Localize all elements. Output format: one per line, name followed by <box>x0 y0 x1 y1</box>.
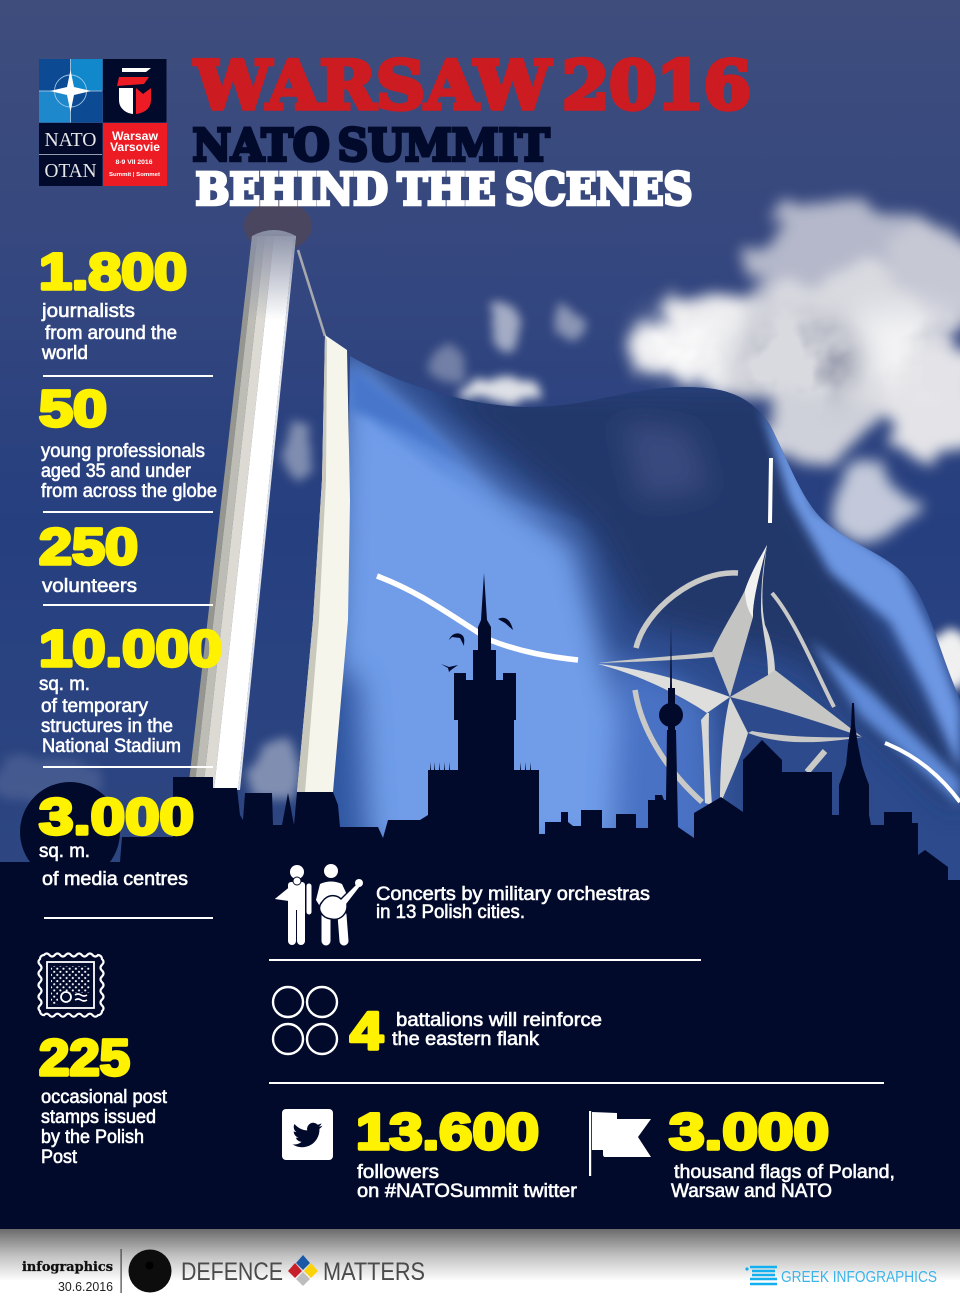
stat: temporary structures: structures in the <box>41 716 173 737</box>
logo: NATO OTAN tile: NATO <box>44 130 96 151</box>
stat: media centres: sq. m. <box>39 841 90 862</box>
title line 3: BEHIND THE SCENES <box>196 164 692 216</box>
stat: battalions: 4 <box>350 1002 384 1061</box>
icon: twitter <box>282 1109 333 1160</box>
stat: flags: 3.000 <box>669 1103 829 1160</box>
stat: post stamps: Post <box>41 1147 78 1168</box>
footer band <box>0 1229 960 1315</box>
logo: black circle <box>128 1250 172 1292</box>
city skyline silhouette <box>0 573 960 1230</box>
stat: journalists <box>39 243 187 364</box>
credit: infographics and date: 30.6.2016 <box>58 1279 113 1294</box>
stat: battalions: the eastern flank <box>392 1029 540 1050</box>
icon: musicians <box>282 864 363 941</box>
stat: young professionals: from across the globe <box>41 481 217 502</box>
logo: Defence Matters: DEFENCE <box>181 1258 283 1286</box>
title line 2: NATO SUMMIT <box>192 120 550 172</box>
stat: temporary structures <box>39 620 222 757</box>
stat: volunteers: 250 <box>39 518 138 575</box>
stat: volunteers: volunteers <box>42 576 137 597</box>
stat: twitter followers: followers <box>357 1162 439 1183</box>
credit: infographics and date: infographics <box>22 1260 113 1275</box>
logo: Warsaw Varsovie tile: Varsovie <box>110 140 160 154</box>
logo: Warsaw emblem tile <box>103 59 166 122</box>
NATO flag <box>297 335 960 900</box>
stat: post stamps: by the Polish <box>41 1127 144 1148</box>
stat: post stamps <box>39 1029 168 1168</box>
stat: temporary structures: sq. m. <box>39 674 90 695</box>
logo: Warsaw Varsovie tile <box>103 123 167 186</box>
logo: NATO star tile <box>39 59 102 122</box>
stat: temporary structures: of temporary <box>41 696 148 717</box>
stat: twitter followers: 13.600 <box>356 1103 539 1160</box>
stat: journalists: 1.800 <box>39 243 187 300</box>
icon: flag <box>589 1111 651 1176</box>
flag white stripes <box>377 458 960 802</box>
birds <box>441 618 513 672</box>
title block <box>192 46 751 216</box>
pole finial <box>244 201 312 251</box>
stat: post stamps: stamps issued <box>41 1107 156 1128</box>
logo: Warsaw Varsovie tile: Warsaw <box>112 129 159 143</box>
logo: NATO OTAN tile <box>39 123 102 186</box>
stat: post stamps: 225 <box>39 1029 130 1086</box>
clouds <box>0 200 960 802</box>
stat: post stamps: occasional post <box>41 1087 168 1108</box>
stat: young professionals <box>39 380 217 502</box>
text: concerts: in 13 Polish cities. <box>376 902 525 923</box>
stat: young professionals: 50 <box>39 380 107 437</box>
stat: media centres: 3.000 <box>39 788 194 845</box>
stat: flags: thousand flags of Poland, <box>674 1162 895 1183</box>
stat: twitter followers: on #NATOSummit twitter <box>357 1181 578 1202</box>
conference logo <box>39 59 167 186</box>
logo: NATO OTAN tile: OTAN <box>44 161 96 182</box>
stat: young professionals: young professionals <box>41 441 205 462</box>
logo: Warsaw Varsovie tile: Summit | Sommet <box>109 172 160 178</box>
stat: battalions <box>350 1002 602 1061</box>
NATO compass rose <box>598 545 862 805</box>
stat: journalists: world <box>41 343 88 364</box>
stat: temporary structures: National Stadium <box>42 736 181 757</box>
stat: journalists: from around the <box>45 323 177 344</box>
icon: four battalion circles <box>273 987 337 1054</box>
logo: Defence Matters <box>181 1255 425 1286</box>
stat: flags <box>669 1103 895 1202</box>
stat: twitter followers <box>356 1103 578 1202</box>
logo: Warsaw Varsovie tile: 8-9 VII 2016 <box>116 160 153 166</box>
stat: media centres <box>39 788 194 890</box>
logo: Greek Infographics <box>745 1267 937 1286</box>
icon: post stamp <box>38 954 104 1017</box>
title line 1: WARSAW 2016 <box>194 46 751 124</box>
logo: Greek Infographics: GREEK INFOGRAPHICS <box>781 1269 937 1286</box>
stat: young professionals: aged 35 and under <box>41 461 192 482</box>
stat: flags: Warsaw and NATO <box>671 1181 832 1202</box>
stat: journalists: journalists <box>41 301 135 322</box>
flag sleeve <box>297 335 350 792</box>
text: concerts: Concerts by military orchestras <box>376 884 650 905</box>
flagpole <box>188 201 325 790</box>
logo: Defence Matters: MATTERS <box>323 1258 425 1286</box>
credit: infographics and date <box>22 1260 113 1294</box>
halyard rope <box>298 250 325 336</box>
stat: temporary structures: 10.000 <box>39 620 222 677</box>
stat: volunteers <box>39 518 138 597</box>
text: concerts <box>376 884 650 923</box>
stat: battalions: battalions will reinforce <box>396 1010 602 1031</box>
stat: media centres: of media centres <box>42 869 188 890</box>
